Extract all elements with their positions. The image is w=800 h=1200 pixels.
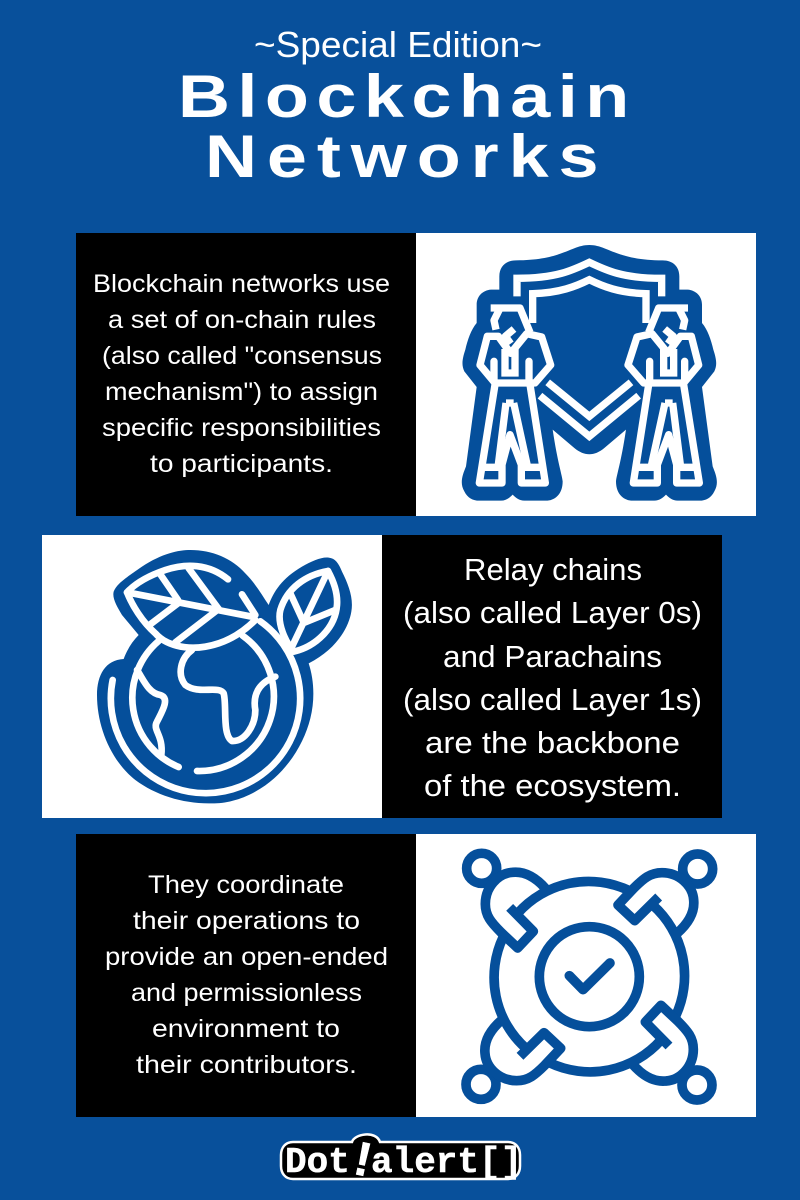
- small leaf: [280, 571, 337, 652]
- title: Networks: [205, 124, 599, 191]
- text block: coordination: [76, 834, 416, 1117]
- subtitle: ~Special Edition~: [254, 24, 542, 65]
- text block: relay chains: are the backbone: [425, 725, 680, 760]
- text block: consensus: Blockchain networks use: [93, 270, 390, 298]
- panel: consensus rules: [76, 233, 756, 516]
- big leaf: [127, 566, 255, 648]
- text block: consensus: to participants.: [150, 450, 333, 478]
- panel: coordination: [76, 834, 756, 1117]
- icon: guards holding shield: [416, 233, 756, 516]
- logo: alert[]: [371, 1142, 522, 1183]
- text block: relay chains: and Parachains: [443, 639, 662, 674]
- title: [178, 64, 629, 191]
- text block: coordination: and permissionless: [131, 979, 362, 1007]
- text block: coordination: their operations to: [133, 907, 360, 935]
- logo: !: [342, 1132, 383, 1194]
- text block: coordination: provide an open-ended: [105, 943, 388, 971]
- text block: consensus: mechanism") to assign: [105, 378, 378, 406]
- title: Blockchain: [178, 64, 629, 131]
- text block: consensus: [76, 233, 416, 516]
- inner circle: [539, 927, 639, 1027]
- shield lines: [517, 262, 662, 296]
- outer ring: [111, 621, 300, 793]
- text block: relay chains: (also called Layer 0s): [403, 595, 702, 630]
- text block: coordination: environment to: [152, 1015, 340, 1043]
- text block: relay chains: [382, 535, 722, 818]
- icon: network with checkmark: [416, 834, 756, 1117]
- text block: relay chains: Relay chains: [464, 552, 642, 587]
- text block: coordination: They coordinate: [148, 871, 344, 899]
- globe: [132, 641, 179, 767]
- check mark: [569, 963, 610, 990]
- header: [178, 24, 629, 191]
- guard figures: [479, 308, 551, 483]
- text block: consensus: a set of on-chain rules: [108, 306, 376, 334]
- text block: consensus: specific responsibilities: [102, 414, 381, 442]
- text block: relay chains: of the ecosystem.: [424, 768, 681, 803]
- logo: [281, 1132, 522, 1194]
- text block: consensus: (also called "consensus: [102, 342, 382, 370]
- panel: relay chains: [42, 535, 722, 818]
- logo: Dot: [285, 1142, 350, 1183]
- text block: relay chains: (also called Layer 1s): [403, 682, 702, 717]
- text block: coordination: their contributors.: [136, 1051, 357, 1079]
- icon: globe with leaves: [42, 535, 382, 818]
